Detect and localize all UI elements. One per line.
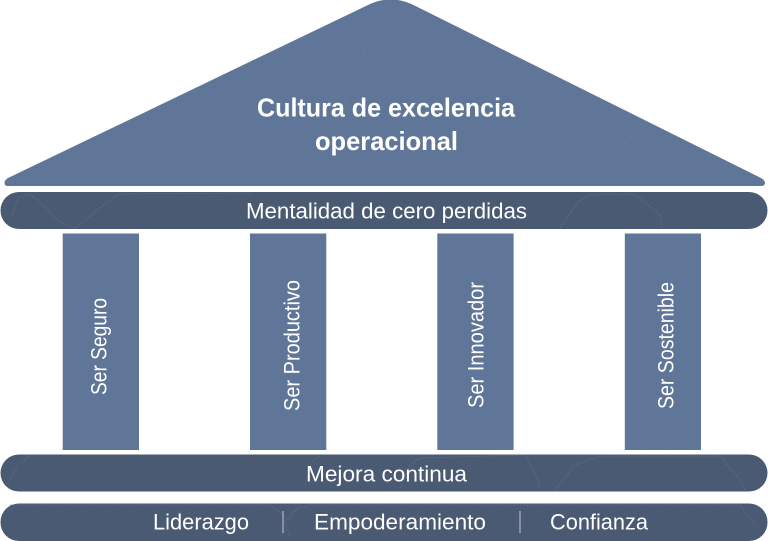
band: Mejora continua xyxy=(0,454,768,492)
label: Confianza: Confianza xyxy=(550,510,649,534)
band: Liderazgo, Empoderamiento, Confianza xyxy=(0,504,768,541)
pillar: Ser Innovador: Ser Innovador xyxy=(463,282,488,408)
separator xyxy=(282,511,284,533)
band: Mentalidad de cero perdidas: Mentalidad de cero perdidas xyxy=(246,198,527,224)
roof: Cultura de excelencia operacional xyxy=(4,0,765,186)
label: Liderazgo: Liderazgo xyxy=(153,510,249,534)
separator xyxy=(519,511,521,533)
pillar: Ser Innovador xyxy=(437,234,514,450)
label: Empoderamiento: Empoderamiento xyxy=(314,510,486,534)
pillar: Ser Sostenible xyxy=(625,234,701,450)
band: Mentalidad de cero perdidas xyxy=(0,192,768,229)
pillar: Ser Seguro xyxy=(63,234,139,450)
title text: Cultura de excelencia xyxy=(257,92,516,122)
title text: operacional xyxy=(315,126,458,156)
pillar: Ser Productivo xyxy=(250,234,326,450)
title text xyxy=(257,92,516,156)
pillar: Ser Productivo: Ser Productivo xyxy=(279,280,304,411)
pillar: Ser Sostenible: Ser Sostenible xyxy=(653,282,678,409)
pillar: Ser Seguro: Ser Seguro xyxy=(86,298,112,395)
band: Mejora continua: Mejora continua xyxy=(306,462,468,486)
